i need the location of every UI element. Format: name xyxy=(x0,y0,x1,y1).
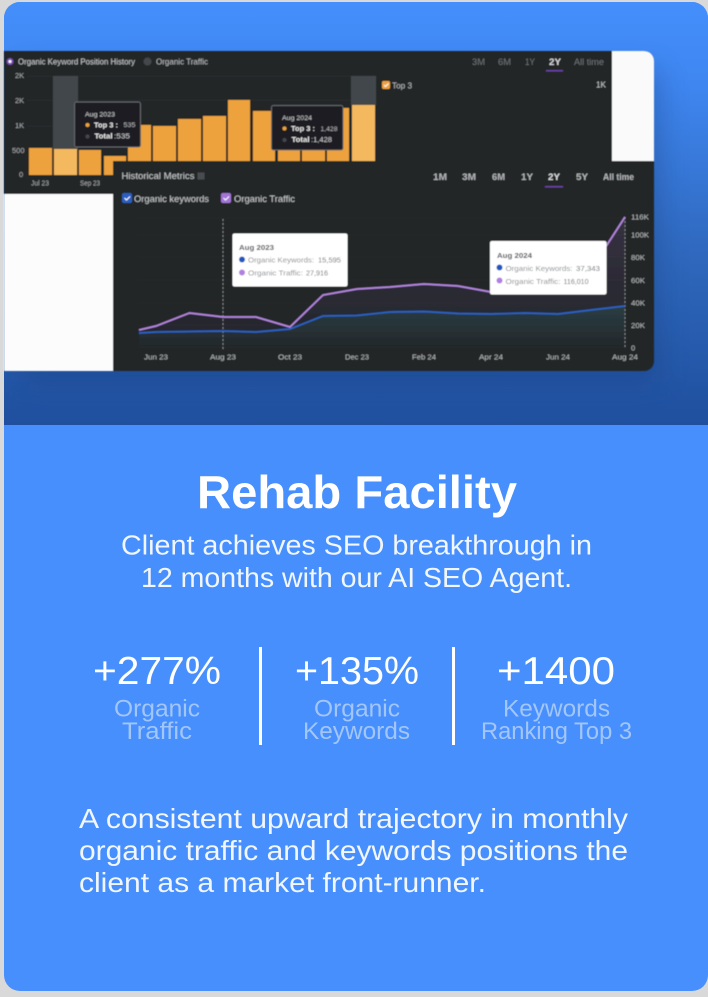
line chart: Jun 24 xyxy=(546,352,570,362)
tooltip: Aug 2024 lines: Aug 2024 xyxy=(497,251,533,260)
tooltip: Aug 2023 lines: 15,595 xyxy=(318,256,341,264)
bar chart: 2K xyxy=(15,96,24,105)
line chart: Aug 23 xyxy=(210,352,236,362)
legend: line chart xyxy=(122,193,296,204)
subtitle: 12 months with our AI SEO Agent. xyxy=(141,562,572,593)
tooltip: Aug 2023 lines: 27,916 xyxy=(306,268,328,278)
line chart: 0 xyxy=(631,344,635,352)
tooltip: Aug 2024 bars: Total xyxy=(292,135,310,144)
line chart: 60K xyxy=(631,276,645,285)
legend: Top 3 xyxy=(382,80,607,90)
bar chart: Jul 23 xyxy=(31,178,49,188)
subtitle: Client achieves SEO breakthrough in xyxy=(121,530,592,560)
tooltip: Aug 2023 bars xyxy=(74,102,140,147)
tooltip: Aug 2024 lines: 37,343 xyxy=(576,264,600,273)
tooltip: Aug 2023 lines: Aug 2023 xyxy=(239,243,274,252)
range tabs top: 1Y xyxy=(525,57,535,67)
bar chart: 500 xyxy=(12,146,25,155)
tooltip: Aug 2024 bars: 1,428 xyxy=(320,126,338,133)
stat: keywords ranking top 3: Ranking Top 3 xyxy=(481,718,632,745)
bar chart xyxy=(12,71,377,188)
panel: analytics screenshot xyxy=(4,51,654,371)
tooltip: Aug 2024 bars: Top 3 : xyxy=(291,124,315,133)
line chart: 100K xyxy=(631,230,649,240)
range tabs lower: 1M xyxy=(433,172,447,182)
tooltip: Aug 2023 bars: Total xyxy=(94,132,112,140)
description: organic traffic and keywords positions the xyxy=(79,835,628,866)
legend: keyword position xyxy=(6,58,208,66)
range tabs lower: 6M xyxy=(492,172,505,182)
range tabs lower: 1Y xyxy=(521,172,533,182)
legend: keyword position: Organic Keyword Position History xyxy=(18,58,135,66)
range tabs top: 6M xyxy=(498,57,511,67)
bar chart: 1K xyxy=(15,121,24,130)
legend: line chart: Organic Traffic xyxy=(234,194,296,204)
tooltip: Aug 2023 bars: 535 xyxy=(124,122,136,129)
tooltip: Aug 2023 bars: Top 3 : xyxy=(94,120,118,130)
line chart: 116K xyxy=(631,212,649,222)
stat: organic keywords xyxy=(295,650,419,745)
tooltip: Aug 2024 bars xyxy=(272,106,343,150)
range tabs lower: 2Y xyxy=(548,172,560,182)
range tabs top xyxy=(472,57,604,72)
stat: organic traffic xyxy=(93,650,221,745)
line chart: Dec 23 xyxy=(345,352,369,362)
tooltip: Aug 2024 lines: Organic Keywords: xyxy=(506,264,572,273)
tooltip: Aug 2023 lines xyxy=(232,234,348,286)
tooltip: Aug 2024 bars: Aug 2024 xyxy=(282,115,312,122)
line chart: Apr 24 xyxy=(479,352,503,362)
line chart: Jun 23 xyxy=(144,352,168,362)
tooltip: Aug 2023 bars: :535 xyxy=(114,132,130,140)
bar chart: 0 xyxy=(19,170,23,179)
line chart: 80K xyxy=(631,253,645,262)
stat: organic keywords: +135% xyxy=(295,650,419,693)
range tabs top: 2Y xyxy=(549,57,561,67)
stat: keywords ranking top 3 xyxy=(481,650,632,745)
tooltip: Aug 2023 lines: Organic Traffic: xyxy=(248,268,303,278)
tooltip: Aug 2024 lines: Organic Traffic: xyxy=(506,277,560,286)
range tabs lower xyxy=(433,172,634,188)
stat: organic traffic: +277% xyxy=(93,650,221,693)
line chart: Aug 24 xyxy=(612,352,638,362)
line chart xyxy=(138,212,649,362)
tooltip: Aug 2024 lines xyxy=(490,241,606,294)
line chart: 40K xyxy=(631,298,645,308)
stat: keywords ranking top 3: +1400 xyxy=(497,650,615,693)
range tabs top: 3M xyxy=(472,57,485,67)
heading: Historical Metrics: Historical Metrics xyxy=(122,171,195,181)
legend: keyword position: Organic Traffic xyxy=(156,58,208,66)
tooltip: Aug 2023 bars: Aug 2023 xyxy=(85,112,115,118)
description xyxy=(79,803,628,898)
line chart: Feb 24 xyxy=(412,352,436,362)
panel: top gradient band xyxy=(4,2,708,425)
stat: organic traffic: Traffic xyxy=(122,718,192,745)
subtitle xyxy=(121,530,592,593)
tooltip: Aug 2023 lines: Organic Keywords: xyxy=(248,256,314,264)
legend: Top 3: Top 3 xyxy=(392,82,413,90)
white area right xyxy=(612,51,654,161)
range tabs lower: All time xyxy=(603,172,634,182)
bar chart: 2K xyxy=(15,71,24,80)
title: Rehab Facility xyxy=(197,466,517,518)
tooltip: Aug 2024 bars: :1,428 xyxy=(311,135,332,144)
range tabs lower: 3M xyxy=(462,172,476,182)
stat: organic traffic: Organic xyxy=(114,696,200,722)
legend: line chart: Organic keywords xyxy=(134,194,210,204)
description: A consistent upward trajectory in monthly xyxy=(79,803,628,834)
legend: Top 3: 1K xyxy=(596,80,607,90)
range tabs top: All time xyxy=(574,57,604,67)
stat: organic keywords: Organic xyxy=(314,696,400,722)
stat: organic keywords: Keywords xyxy=(303,718,410,745)
bar chart: Sep 23 xyxy=(80,178,100,188)
line chart: Oct 23 xyxy=(278,352,302,362)
range tabs lower: 5Y xyxy=(576,172,588,182)
stat: keywords ranking top 3: Keywords xyxy=(503,696,610,722)
tooltip: Aug 2024 lines: 116,010 xyxy=(564,277,588,286)
line chart: 20K xyxy=(631,321,645,330)
white area left xyxy=(4,194,113,371)
description: client as a market front-runner. xyxy=(79,867,486,898)
